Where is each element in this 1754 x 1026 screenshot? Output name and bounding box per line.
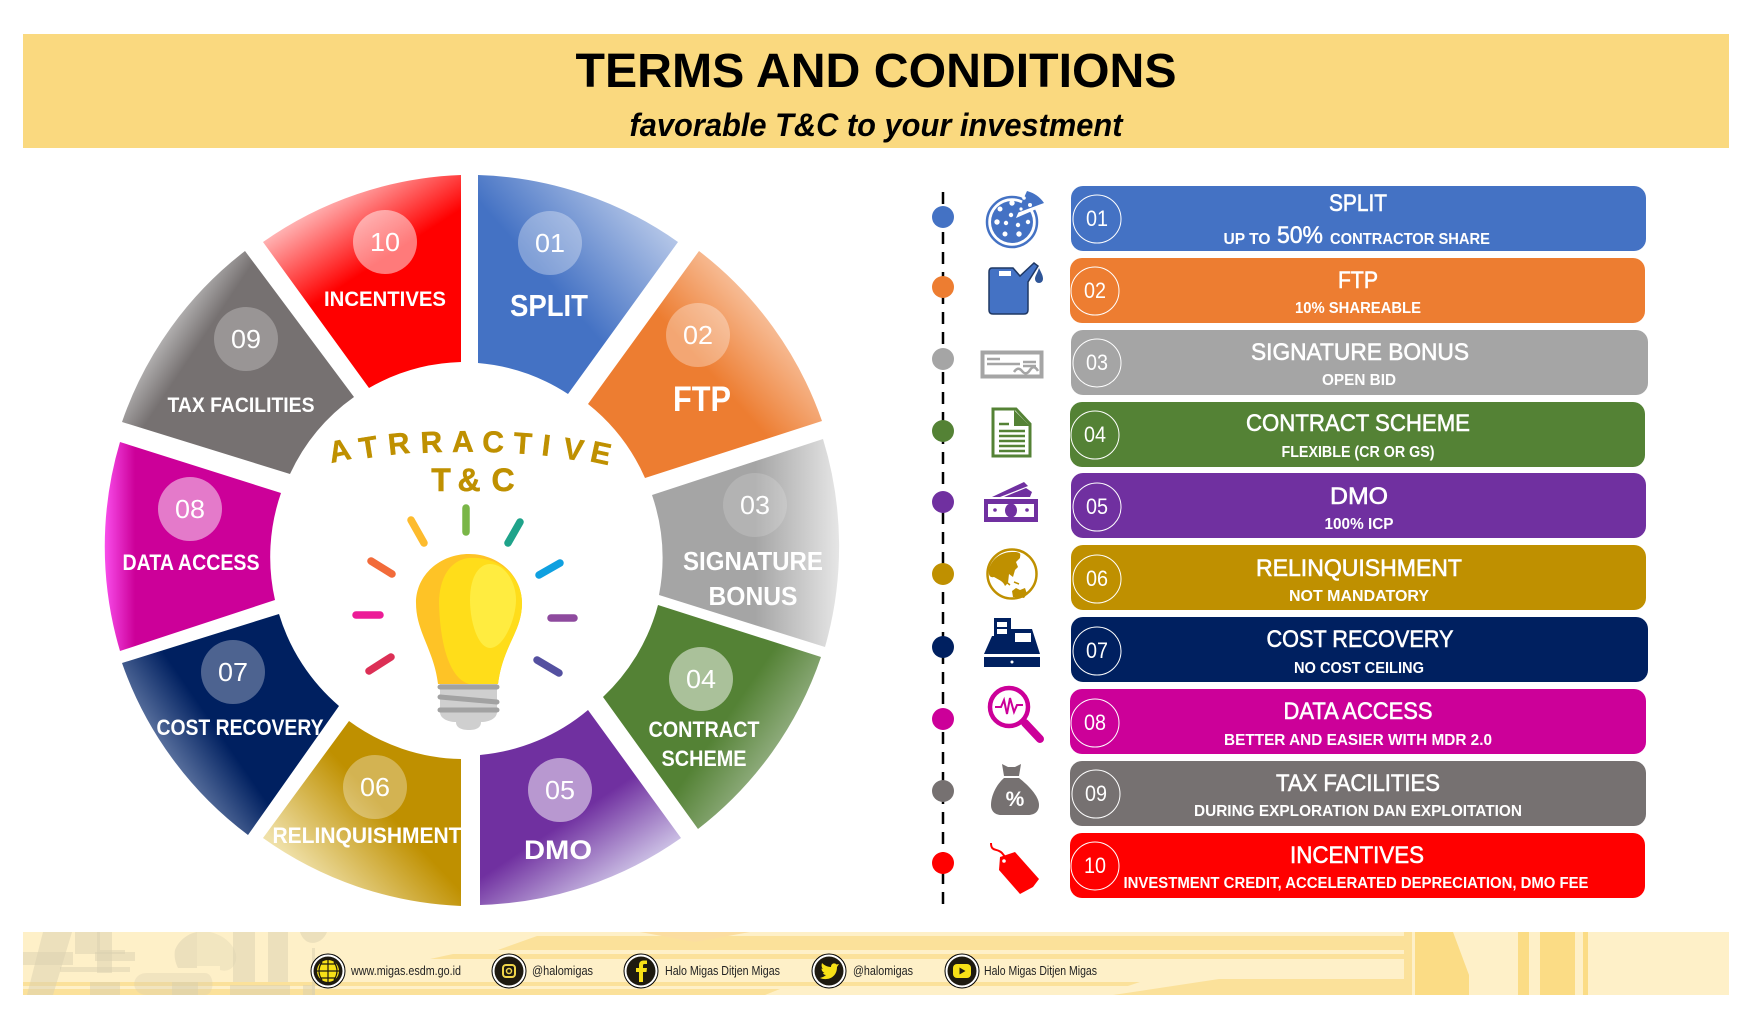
segment 07 cost recovery: [122, 614, 339, 835]
bar 03 signature bonus: SIGNATURE BONUS: [1251, 339, 1469, 366]
segment 07 cost recovery: COST RECOVERY: [156, 715, 324, 740]
bar 04 contract scheme: FLEXIBLE (CR OR GS): [1282, 444, 1434, 461]
segment 06 relinquishment: 06: [360, 772, 390, 802]
bar 02 ftp: FTP: [1338, 267, 1378, 294]
icon: money: [984, 482, 1038, 522]
bar 02 ftp: [1070, 258, 1645, 323]
bar 01 split: 01: [1086, 206, 1108, 231]
segment 04 contract scheme: SCHEME: [662, 746, 746, 771]
social: website: [311, 954, 461, 988]
segment 02 ftp: [588, 251, 822, 478]
icon: cash register: [984, 618, 1040, 667]
segment 07 cost recovery: 07: [218, 657, 248, 687]
social: instagram: @halomigas: [532, 963, 593, 978]
bar 09 tax facilities: DURING EXPLORATION DAN EXPLOITATION: [1194, 803, 1522, 820]
icon: cheque: [982, 352, 1042, 376]
segment 05 dmo: 05: [545, 775, 575, 805]
bar 01 split: SPLIT: [1329, 190, 1387, 217]
bar 03 signature bonus: OPEN BID: [1322, 372, 1396, 389]
social: instagram: [492, 954, 593, 988]
centre heading attractive t&c: [326, 426, 614, 498]
bar 04 contract scheme: 04: [1084, 422, 1106, 447]
segment 03 signature bonus: 03: [740, 490, 770, 520]
bar 08 data access: BETTER AND EASIER WITH MDR 2.0: [1224, 732, 1492, 749]
bar 06 relinquishment: RELINQUISHMENT: [1256, 555, 1462, 582]
segment 08 data access: 08: [175, 494, 205, 524]
bar 10 incentives: 10: [1084, 853, 1106, 878]
bar 07 cost recovery: [1071, 617, 1648, 682]
segment 04 contract scheme: [603, 605, 821, 829]
bar 07 cost recovery: 07: [1086, 638, 1108, 663]
segment 02 ftp: FTP: [673, 380, 731, 419]
bar 09 tax facilities: 09: [1085, 781, 1107, 806]
bar 06 relinquishment: 06: [1086, 566, 1108, 591]
bar 05 dmo: 05: [1086, 494, 1108, 519]
segment 10 incentives: INCENTIVES: [324, 288, 446, 311]
icon: colored rays: [356, 508, 574, 673]
icon: globe: [988, 550, 1036, 598]
segment 10 incentives: [263, 175, 461, 388]
social: youtube: Halo Migas Ditjen Migas: [984, 963, 1097, 978]
subtitle: favorable T&C to your investment: [630, 107, 1124, 143]
icon: money bag: %: [1006, 788, 1025, 811]
bar 06 relinquishment: NOT MANDATORY: [1289, 588, 1429, 605]
icon: magnifier with pulse: [990, 688, 1040, 739]
bar 09 tax facilities: [1070, 761, 1646, 826]
segment 01 split: [478, 175, 678, 394]
bar 05 dmo: 100% ICP: [1324, 516, 1394, 533]
segment 06 relinquishment: RELINQUISHMENT: [272, 823, 462, 848]
segment 10 incentives: 10: [370, 227, 400, 257]
segment 08 data access: DATA ACCESS: [122, 550, 260, 575]
bar 10 incentives: [1070, 833, 1645, 898]
centre heading attractive t&c: ATRRACTIVE: [326, 426, 614, 472]
bar 06 relinquishment: [1071, 545, 1646, 610]
bar 07 cost recovery: COST RECOVERY: [1266, 626, 1454, 653]
icon: pizza: [987, 190, 1048, 247]
segment 09 tax facilities: 09: [231, 324, 261, 354]
bar 01 split: 50%: [1277, 222, 1323, 249]
bar 10 incentives: INVESTMENT CREDIT, ACCELERATED DEPRECIATION, DMO FEE: [1124, 875, 1589, 892]
segment 05 dmo: [480, 710, 681, 905]
social: twitter: [812, 954, 913, 988]
bar 02 ftp: 02: [1084, 278, 1106, 303]
segment 01 split: SPLIT: [510, 288, 588, 323]
bar 01 split: CONTRACTOR SHARE: [1330, 231, 1490, 248]
bar 10 incentives: INCENTIVES: [1290, 842, 1424, 869]
wheel diagram: [105, 175, 839, 906]
segment 03 signature bonus: BONUS: [708, 581, 798, 611]
social: facebook: Halo Migas Ditjen Migas: [665, 963, 780, 978]
social: facebook: [624, 954, 780, 988]
bar 01 split: [1071, 186, 1646, 251]
icon: money bag: [991, 764, 1039, 815]
timeline dashed line with dots: [932, 192, 954, 906]
segment 03 signature bonus: [652, 439, 839, 647]
segment 08 data access: [105, 442, 281, 651]
header banner: [23, 34, 1729, 148]
bar 01 split: UP TO: [1224, 231, 1270, 248]
social: website: www.migas.esdm.go.id: [350, 963, 461, 978]
bar 05 dmo: DMO: [1330, 483, 1388, 510]
bar 08 data access: DATA ACCESS: [1284, 698, 1432, 725]
icon: document: [993, 409, 1030, 456]
segment 09 tax facilities: TAX FACILITIES: [168, 394, 314, 417]
segment 03 signature bonus: SIGNATURE: [683, 546, 823, 576]
segment 02 ftp: 02: [683, 320, 713, 350]
segment 09 tax facilities: [122, 251, 354, 474]
bar 04 contract scheme: CONTRACT SCHEME: [1246, 410, 1470, 437]
segment 06 relinquishment: [263, 721, 462, 906]
bar 08 data access: 08: [1084, 710, 1106, 735]
social: twitter: @halomigas: [853, 963, 913, 978]
segment 04 contract scheme: 04: [686, 664, 716, 694]
bar 09 tax facilities: TAX FACILITIES: [1276, 770, 1440, 797]
bar 03 signature bonus: 03: [1086, 350, 1108, 375]
icon: jerry can: [989, 263, 1043, 314]
icon: light bulb: [356, 508, 574, 730]
segment 05 dmo: DMO: [524, 835, 592, 865]
bar 08 data access: [1070, 689, 1646, 754]
segment 04 contract scheme: CONTRACT: [648, 717, 760, 742]
icon: price tag: [991, 843, 1039, 894]
centre heading attractive t&c: T&C: [431, 462, 515, 498]
title: TERMS AND CONDITIONS: [576, 45, 1176, 98]
social: youtube: [945, 954, 1097, 988]
segment 01 split: 01: [535, 228, 565, 258]
bar 02 ftp: 10% SHAREABLE: [1295, 300, 1421, 317]
bar 04 contract scheme: [1070, 402, 1645, 467]
bar 05 dmo: [1071, 473, 1646, 538]
footer band: [23, 932, 1729, 995]
bar 03 signature bonus: [1071, 330, 1648, 395]
bar 07 cost recovery: NO COST CEILING: [1294, 660, 1424, 677]
